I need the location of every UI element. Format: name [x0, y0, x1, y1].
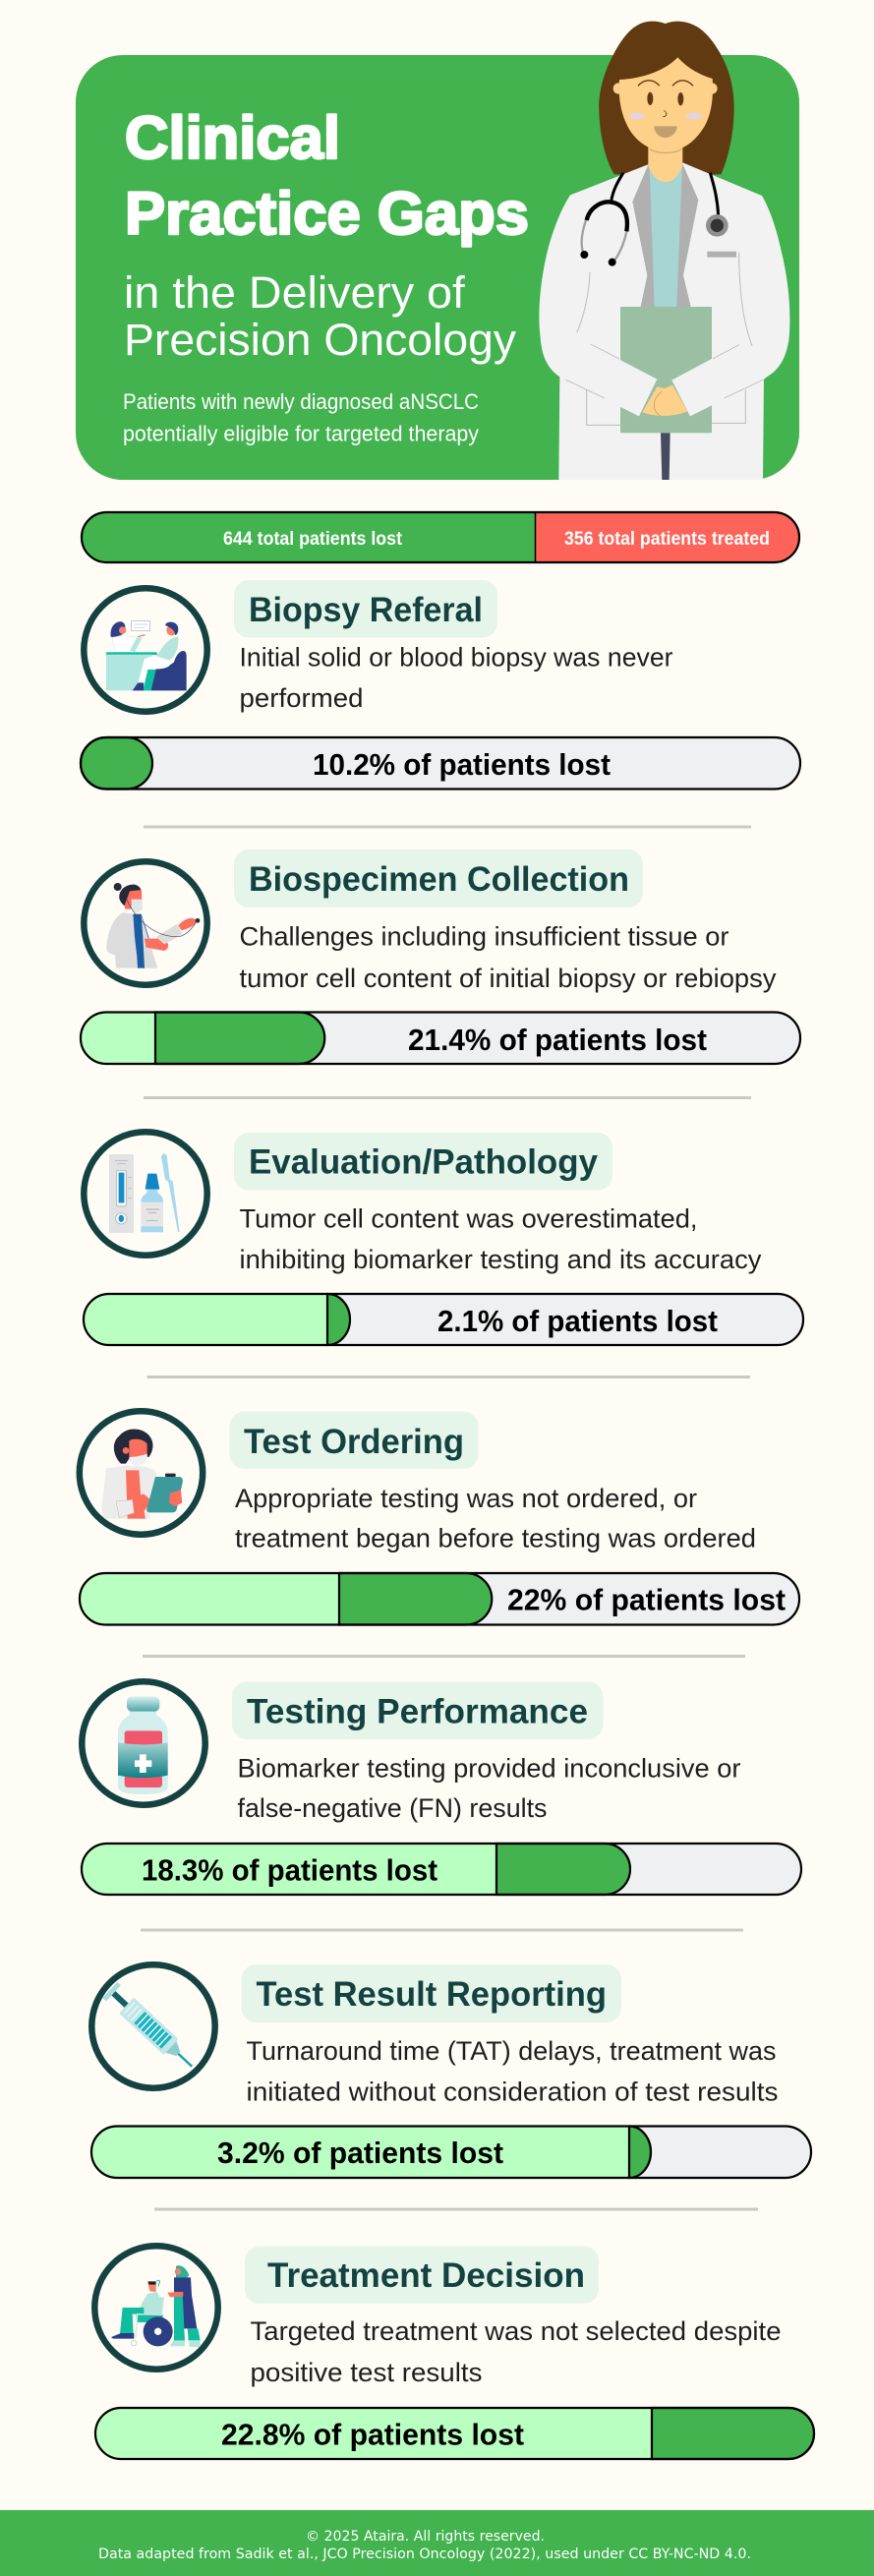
description: Challenges including insufficient tissue or: [240, 922, 729, 952]
icon: clinician with stethoscope: [84, 861, 207, 985]
progress bar: 22%: [80, 1573, 799, 1624]
description: Initial solid or blood biopsy was never: [240, 643, 673, 673]
panel: Test Result Reporting: [91, 1964, 811, 2178]
description: Biomarker testing provided inconclusive or: [238, 1754, 741, 1784]
panel: Biopsy Referal: [81, 580, 800, 789]
progress bar: 21.4%: [81, 1013, 800, 1064]
description: performed: [240, 683, 364, 713]
title: Clinical Practice Gaps: [125, 104, 529, 247]
description: [240, 643, 673, 713]
heading pill: [232, 1681, 604, 1739]
footer: Data adapted from Sadik et al., JCO Precision Oncology (2022), used under CC BY-NC-ND 4.0.: [98, 2547, 751, 2562]
heading pill: Biospecimen Collection: [249, 860, 629, 899]
description: Turnaround time (TAT) delays, treatment was: [246, 2036, 777, 2066]
heading pill: Testing Performance: [247, 1693, 588, 1730]
progress bar: 22.8%: [95, 2408, 814, 2459]
subtitle: in the Delivery of Precision Oncology: in the Delivery of: [124, 267, 466, 318]
text: patient population: potentially eligible for targeted therapy: [123, 421, 479, 446]
description: [235, 1484, 756, 1553]
label: 356 total patients treated: 356 total patients treated: [564, 528, 770, 550]
progress bar: 21.4%: 21.4% of patients lost: [408, 1023, 707, 1057]
heading pill: Biopsy Referal: [249, 591, 483, 629]
progress bar: 22.8%: 22.8% of patients lost: [221, 2417, 524, 2452]
label: 644 total patients lost: 644 total patients lost: [223, 528, 402, 550]
description: Tumor cell content was overestimated,: [240, 1203, 698, 1233]
description: Appropriate testing was not ordered, or: [235, 1484, 697, 1513]
footer: © 2025 Ataira. All rights reserved.: [306, 2529, 545, 2545]
icon: clinician with wheelchair patient: [94, 2246, 218, 2370]
text: patient population: Patients with newly diagnosed aNSCLC: [123, 389, 479, 414]
description: treatment began before testing was ordered: [235, 1524, 756, 1553]
progress bar: 3.2%: [91, 2126, 811, 2178]
heading pill: [230, 1412, 478, 1469]
description: [250, 2316, 781, 2387]
footer: [0, 2510, 874, 2576]
heading pill: Evaluation/Pathology: [249, 1142, 599, 1182]
icon: doctor illustration: [539, 22, 789, 480]
title: Clinical Practice Gaps: Practice Gaps: [125, 180, 529, 247]
description: [246, 2036, 779, 2106]
panel: Evaluation/Pathology: [84, 1132, 803, 1345]
text: patient population: [123, 389, 479, 446]
heading pill: Treatment Decision: [267, 2256, 585, 2295]
description: positive test results: [250, 2358, 482, 2387]
panel: Treatment Decision: [94, 2246, 814, 2459]
description: Targeted treatment was not selected despite: [250, 2316, 781, 2346]
icon: doctor and patient consultation: [84, 588, 207, 712]
panel: Biospecimen Collection: [81, 849, 800, 1064]
progress bar: 10.2%: [81, 737, 800, 789]
progress bar: 18.3%: [82, 1844, 801, 1895]
icon: medicine vial: [82, 1681, 205, 1805]
heading pill: [242, 1964, 621, 2022]
heading pill: Test Ordering: [244, 1423, 464, 1461]
heading pill: [234, 849, 643, 907]
bar: total patients lost vs treated: [82, 512, 799, 562]
subtitle: in the Delivery of Precision Oncology: Precision Oncology: [124, 315, 517, 365]
icon: test cassette, bottle and pipette: [84, 1132, 207, 1256]
progress bar: 3.2%: 3.2% of patients lost: [217, 2136, 503, 2170]
heading pill: [234, 1133, 612, 1190]
panel: hero banner: [76, 22, 799, 480]
title: Clinical Practice Gaps: Clinical: [125, 104, 340, 171]
icon: syringe: [91, 1964, 215, 2088]
icon: clinician with clipboard: [80, 1411, 203, 1535]
description: initiated without consideration of test results: [246, 2077, 779, 2106]
heading pill: [245, 2246, 599, 2304]
panel: Testing Performance: [82, 1681, 801, 1895]
subtitle: in the Delivery of Precision Oncology: [124, 267, 517, 365]
panel: Test Ordering: [80, 1411, 799, 1624]
progress bar: 22%: 22% of patients lost: [507, 1583, 786, 1616]
progress bar: 10.2%: 10.2% of patients lost: [313, 747, 611, 782]
description: [240, 922, 777, 993]
heading pill: [234, 580, 497, 637]
description: [238, 1754, 741, 1823]
description: inhibiting biomarker testing and its accuracy: [240, 1245, 762, 1274]
progress bar: 18.3%: 18.3% of patients lost: [142, 1852, 437, 1888]
description: [240, 1203, 762, 1274]
description: false-negative (FN) results: [238, 1793, 547, 1823]
heading pill: Test Result Reporting: [256, 1975, 607, 2014]
progress bar: 2.1%: [84, 1294, 803, 1345]
description: tumor cell content of initial biopsy or rebiopsy: [240, 964, 777, 993]
progress bar: 2.1%: 2.1% of patients lost: [437, 1304, 718, 1338]
